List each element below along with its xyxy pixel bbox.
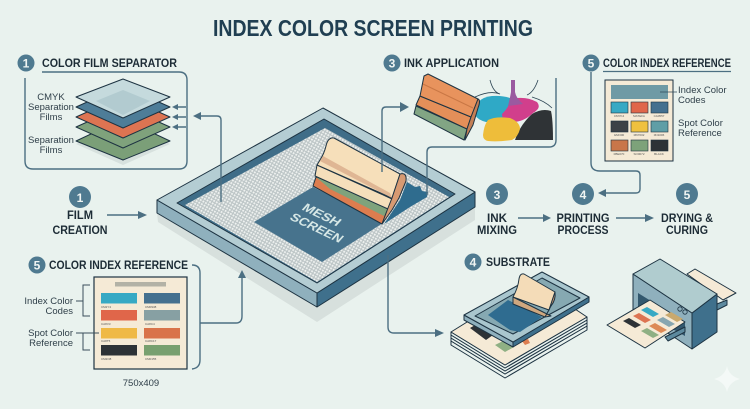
heading: substrate: SUBSTRATE (486, 257, 550, 269)
left face (633, 274, 692, 349)
blue stencil area (254, 187, 383, 262)
reference card: 0N1006 (654, 133, 665, 137)
reference card: CA8T5 (101, 339, 111, 343)
bracket: spot color reference (76, 333, 99, 350)
step 4: printing process: PROCESS (558, 225, 609, 237)
panel: substrate (451, 254, 589, 378)
bracket: index color codes (76, 285, 90, 316)
badge 5 (28, 256, 46, 274)
label: mesh screen: MESH (299, 201, 344, 229)
badge 1 (18, 54, 34, 72)
connector: color index to screen (200, 270, 246, 323)
small frame (464, 272, 589, 347)
connector: screen to substrate (388, 255, 444, 337)
small arrows to films (172, 104, 186, 130)
label: separation films: Films (40, 145, 63, 156)
reference card: 0A6300 (614, 133, 625, 137)
connector: squeegee to ink application (382, 102, 409, 172)
top face (633, 259, 717, 313)
step 3: ink mixing: 3 (494, 188, 501, 202)
reference card: CA8C4 (145, 322, 155, 326)
reference card: SO0072 (633, 152, 645, 156)
step 1: film creation (52, 186, 108, 237)
label: CMYK separation films: Films (40, 112, 63, 123)
reference card: BLACK (654, 152, 664, 156)
frame inner wall (177, 119, 455, 283)
hand squeegee (414, 74, 480, 140)
label: spot color reference: Reference (29, 338, 73, 349)
small squeegee (513, 274, 555, 317)
reference card: CM2Y4 (101, 305, 111, 309)
connector down to printing process (591, 72, 640, 197)
reference card: CM2O8 (101, 357, 112, 361)
step 4: printing process: 4 (580, 188, 587, 202)
label: index color codes: Codes (678, 95, 706, 106)
arrow: ink mixing to printing (518, 214, 551, 222)
mesh surface (185, 128, 449, 282)
step 5: drying and curing: 5 (684, 188, 691, 202)
badge 4: 4 (470, 256, 477, 270)
back paper (687, 269, 736, 300)
reference card: CM0938 (145, 305, 157, 309)
label: spot color reference: Reference (678, 128, 722, 139)
reference card: CA8C17 (145, 339, 157, 343)
label: index color codes: Codes (46, 306, 73, 317)
badge 5 (582, 54, 600, 72)
arrow: printing to drying (616, 214, 654, 222)
reference card: MATEFA (633, 114, 645, 118)
step 5: drying and curing: DRYING & (661, 213, 713, 225)
reference card (605, 80, 677, 161)
label: index color codes: Index Color (678, 85, 727, 96)
step 1: film creation: CREATION (52, 225, 108, 237)
step 3: ink mixing: MIXING (477, 225, 517, 237)
paper swatches (623, 307, 683, 338)
step 4: printing process (556, 183, 610, 237)
main squeegee (313, 138, 406, 224)
heading: ink application: INK APPLICATION (404, 58, 499, 70)
arrow: film creation to screen (107, 211, 147, 219)
tray (665, 327, 685, 341)
label: spot color reference: Spot Color (678, 118, 723, 129)
step 4: printing process: PRINTING (556, 213, 610, 225)
frame top surface (157, 108, 475, 293)
step 1: film creation: FILM (67, 210, 93, 222)
panel: color index reference (top right) (582, 54, 731, 197)
dimension caption: 750x409 (123, 378, 159, 389)
icon: printer (607, 259, 736, 349)
reference card: CM0155 (145, 357, 157, 361)
step 3: ink mixing (477, 183, 517, 237)
step 5: drying and curing (661, 183, 713, 237)
panel outline (25, 72, 187, 169)
step 5: drying and curing: CURING (666, 225, 708, 237)
bracket right (192, 265, 200, 369)
panel: ink application (384, 54, 553, 141)
reference card: 0BE070 (614, 152, 625, 156)
connector: screen to film separator (193, 112, 221, 202)
badge 3: 3 (389, 56, 396, 70)
reference card (94, 277, 187, 369)
knobs (678, 307, 687, 314)
connector: ink panel to screen (427, 78, 556, 195)
icon: sparkle watermark (714, 366, 740, 392)
front face (692, 294, 717, 349)
panel: color index reference (bottom left) (24, 256, 200, 389)
badge 5: 5 (34, 258, 41, 272)
reference card: M67002 (634, 133, 645, 137)
label: separation films: Separation (28, 135, 74, 146)
label: mesh screen (287, 201, 346, 245)
squeegee shadow (384, 182, 428, 224)
stacked separation films (76, 79, 170, 165)
label: index color codes: Index Color (24, 296, 73, 307)
reference card: CMYK4 (614, 114, 624, 118)
output paper (607, 300, 685, 348)
panel: color film separator (18, 54, 187, 169)
paper stack (451, 281, 587, 378)
title: INDEX COLOR SCREEN PRINTING (213, 15, 533, 41)
frame shadow (157, 207, 475, 322)
main mesh screen frame (157, 108, 475, 322)
reference card: CA0557 (654, 114, 665, 118)
reference card: CA8V3 (101, 322, 111, 326)
label: CMYK separation films: CMYK (37, 92, 65, 103)
label: spot color reference: Spot Color (28, 328, 73, 339)
heading underline (603, 70, 731, 72)
ink blobs (475, 80, 553, 141)
paper slot (638, 293, 685, 336)
label: CMYK separation films: Separation (28, 102, 74, 113)
heading: color index reference: COLOR INDEX REFERENCE (49, 260, 188, 272)
back tray (717, 300, 727, 310)
step 1: film creation: 1 (77, 191, 84, 205)
badge 1: 1 (23, 56, 30, 70)
badge 5: 5 (588, 56, 595, 70)
label: mesh screen: SCREEN (287, 211, 346, 245)
badge 3 (384, 54, 400, 72)
frame outer sides (157, 200, 317, 307)
heading: color film separator: COLOR FILM SEPARATOR (42, 58, 178, 70)
step 3: ink mixing: INK (487, 213, 508, 225)
